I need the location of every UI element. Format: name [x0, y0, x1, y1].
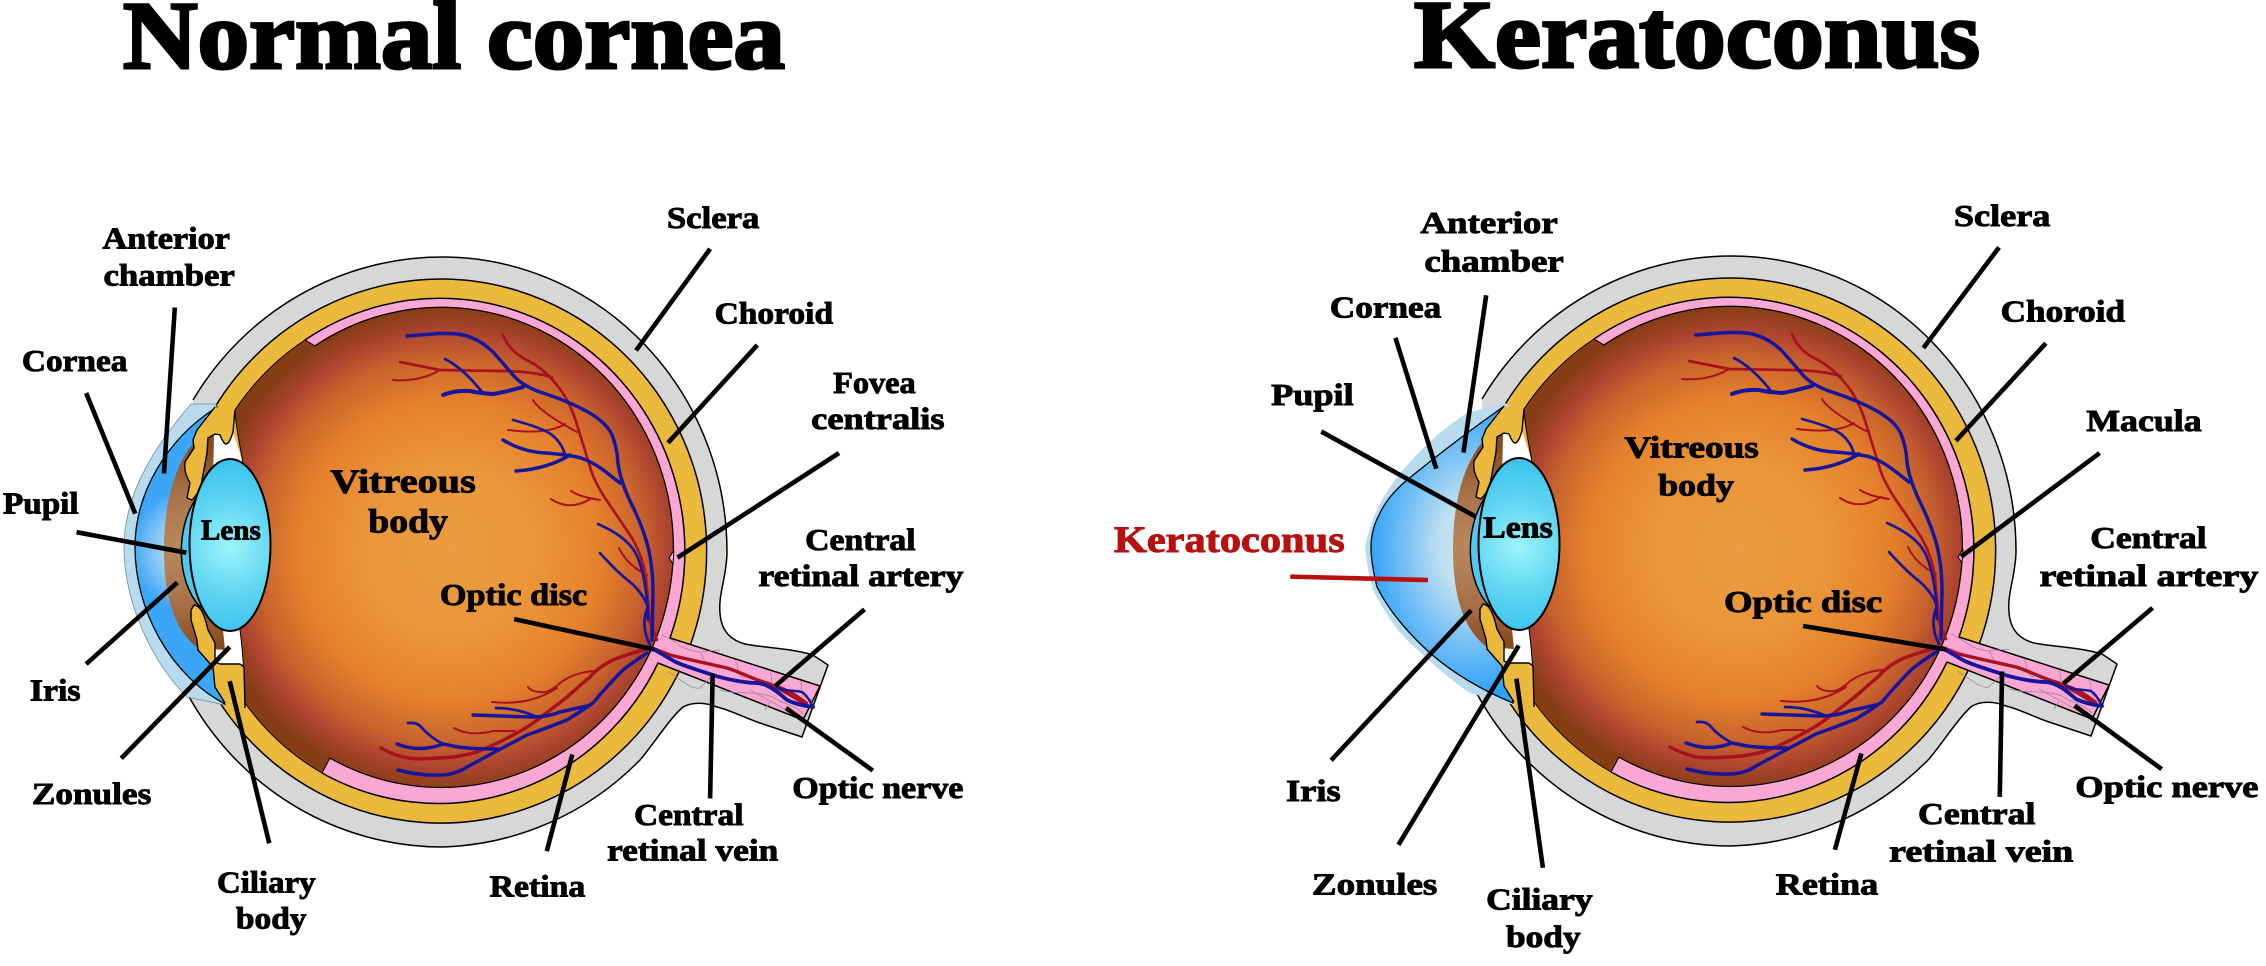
label: Vitreous body: body: [1658, 469, 1735, 503]
label: Cornea: Cornea: [22, 344, 127, 378]
choroid: [1504, 278, 1996, 822]
labels: keratoconus: [1114, 199, 2259, 954]
retinal vessels: [1670, 332, 1946, 774]
sclera: [1476, 256, 2117, 846]
macula notch: [1958, 549, 1963, 563]
iris: [164, 436, 225, 650]
label: Vitreous body: Vitreous: [330, 464, 476, 501]
label: Anterior chamber: [1420, 206, 1564, 279]
label: Central retinal artery: Central: [805, 523, 916, 557]
labels: normal cornea: [3, 201, 964, 935]
cornea anterior chamber: [135, 407, 225, 704]
white gap: [206, 432, 244, 664]
panel: normal cornea eye diagram: [124, 257, 828, 847]
label: Central retinal vein: retinal vein: [607, 834, 778, 868]
label: Central retinal vein: retinal vein: [1889, 835, 2073, 869]
label: Ciliary body: [217, 866, 316, 935]
label: Iris: Iris: [30, 673, 81, 707]
label: Optic nerve: Optic nerve: [792, 771, 963, 805]
retina and optic nerve sheath: [1594, 297, 2109, 802]
fovea notch: [669, 550, 674, 564]
label: Lens: Lens: [1483, 510, 1553, 544]
label: Central retinal vein: Central: [1918, 797, 2036, 831]
label: Central retinal artery: retinal artery: [758, 559, 964, 593]
label: Central retinal artery: retinal artery: [2039, 559, 2259, 593]
label: Vitreous body: [1624, 431, 1759, 503]
ciliary body upper: [185, 407, 235, 500]
label: Optic nerve: Optic nerve: [2075, 770, 2258, 804]
optic nerve vessels: [652, 635, 813, 714]
retinal vessels: [381, 333, 657, 775]
label: Pupil: Pupil: [3, 486, 79, 520]
label: Retina: Retina: [490, 870, 585, 903]
label: Pupil: Pupil: [1271, 378, 1354, 412]
ciliary body upper: [1474, 406, 1524, 499]
conical cornea outer layer: [1365, 403, 1514, 705]
label: Central retinal artery: [758, 523, 964, 593]
sclera: [187, 257, 828, 847]
label: Optic disc: Optic disc: [1724, 585, 1882, 619]
ciliary body lower: [191, 605, 245, 708]
label: Anterior chamber: Anterior: [103, 222, 230, 256]
label: Zonules: Zonules: [1312, 868, 1437, 902]
label: Ciliary body: body: [1506, 920, 1581, 954]
label: Anterior chamber: [103, 222, 235, 293]
label: Anterior chamber: chamber: [104, 259, 235, 293]
vitreous body: [1524, 306, 1962, 786]
label: Keratoconus (red): Keratoconus: [1114, 519, 1345, 560]
cornea outer layer: [124, 404, 225, 705]
label: Vitreous body: body: [368, 503, 448, 540]
label: Central retinal vein: [607, 798, 778, 868]
label: Fovea centralis: Fovea: [833, 366, 916, 400]
label: Central retinal vein: Central: [634, 798, 744, 832]
choroid: [215, 279, 707, 823]
label: Cornea: Cornea: [1330, 290, 1441, 324]
label: Optic disc: Optic disc: [440, 578, 587, 612]
label: Iris: Iris: [1286, 774, 1341, 808]
label: Ciliary body: Ciliary: [1486, 882, 1593, 916]
lens: [190, 459, 270, 631]
retina and optic nerve sheath: [305, 298, 820, 803]
vitreous body: [235, 307, 673, 787]
ciliary body lower: [1480, 604, 1534, 707]
label: Central retinal artery: [2039, 521, 2259, 593]
leader lines: keratoconus: [1290, 247, 2162, 868]
conical cornea inner: [1371, 407, 1513, 703]
label: Choroid: Choroid: [2001, 294, 2125, 328]
panel: keratoconus eye diagram: [1365, 256, 2117, 846]
pupil capsule: [181, 500, 218, 610]
label: Central retinal vein: [1889, 797, 2073, 869]
label: Lens: Lens: [201, 514, 261, 546]
label: Fovea centralis: centralis: [811, 402, 945, 436]
pupil capsule: [1470, 499, 1507, 609]
label: Ciliary body: [1486, 882, 1593, 954]
label: Macula: Macula: [2086, 404, 2202, 438]
label: Fovea centralis: [811, 366, 945, 436]
label: Vitreous body: Vitreous: [1624, 431, 1759, 465]
label: Ciliary body: Ciliary: [217, 866, 316, 900]
label: Vitreous body: [330, 464, 476, 540]
label: Anterior chamber: chamber: [1424, 245, 1564, 279]
label: Central retinal artery: Central: [2090, 521, 2207, 555]
white gap: [1495, 431, 1533, 663]
iris: [1453, 435, 1514, 649]
optic nerve vessels: [1941, 634, 2102, 713]
leader lines: normal cornea: [77, 249, 873, 851]
label: Ciliary body: body: [236, 901, 307, 935]
label: Sclera: Sclera: [1954, 199, 2050, 233]
label: Sclera: Sclera: [667, 201, 759, 235]
label: Choroid: Choroid: [715, 296, 833, 330]
label: Retina: Retina: [1776, 868, 1878, 902]
label: Anterior chamber: Anterior: [1420, 206, 1558, 240]
lens: [1478, 458, 1560, 630]
label: Zonules: Zonules: [32, 777, 151, 811]
